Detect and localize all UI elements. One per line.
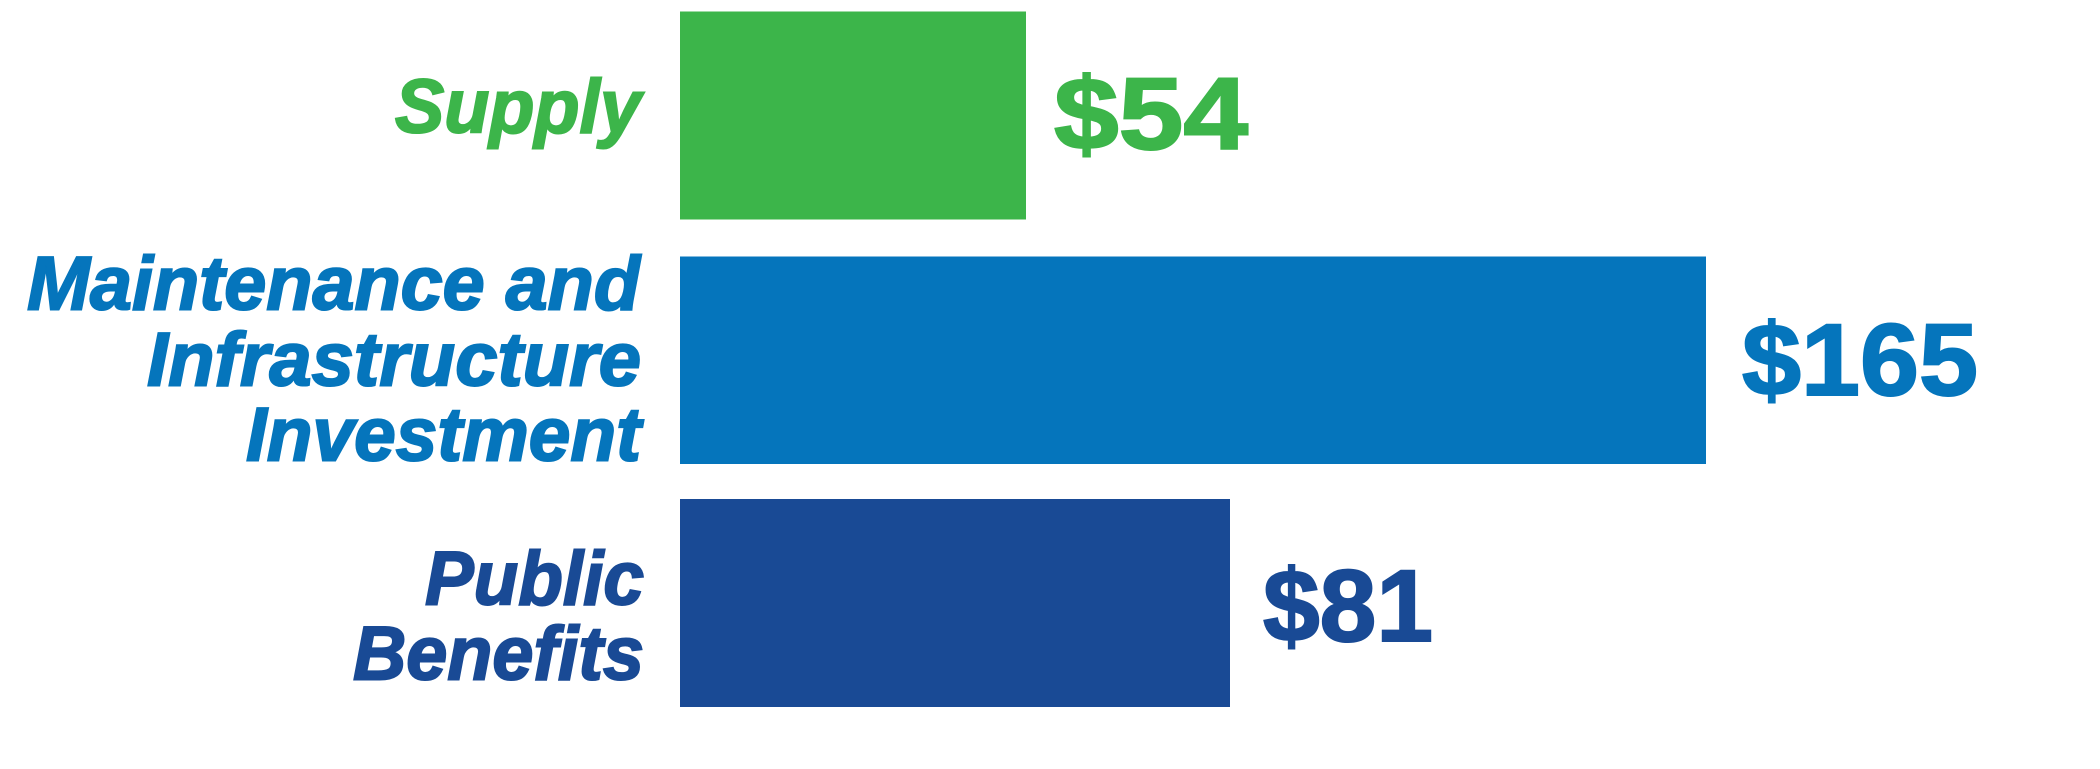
label: Public Benefits: Benefits [353, 612, 644, 696]
row: Public Benefits [353, 499, 1433, 707]
label: Supply: Supply [395, 64, 645, 150]
row: Maintenance and Infrastructure Investment [27, 242, 1978, 478]
value: $81: $81 [1263, 549, 1433, 663]
label: Public Benefits [353, 536, 644, 696]
label: Public Benefits: Public [425, 536, 644, 622]
value: $54: $54 [1054, 57, 1248, 171]
bar: Maintenance and Infrastructure Investment [680, 256, 1706, 464]
label: Maintenance and Infrastructure Investment [27, 242, 644, 478]
row: Supply [395, 12, 1248, 220]
label: Maintenance and Infrastructure Investment: Maintenance and [27, 242, 642, 326]
bar: Public Benefits [680, 499, 1230, 707]
label: Maintenance and Infrastructure Investment: Infrastructure [147, 318, 641, 402]
value: $165: $165 [1742, 303, 1978, 417]
bar: Supply [680, 12, 1026, 220]
label: Maintenance and Infrastructure Investment: Investment [246, 392, 644, 478]
